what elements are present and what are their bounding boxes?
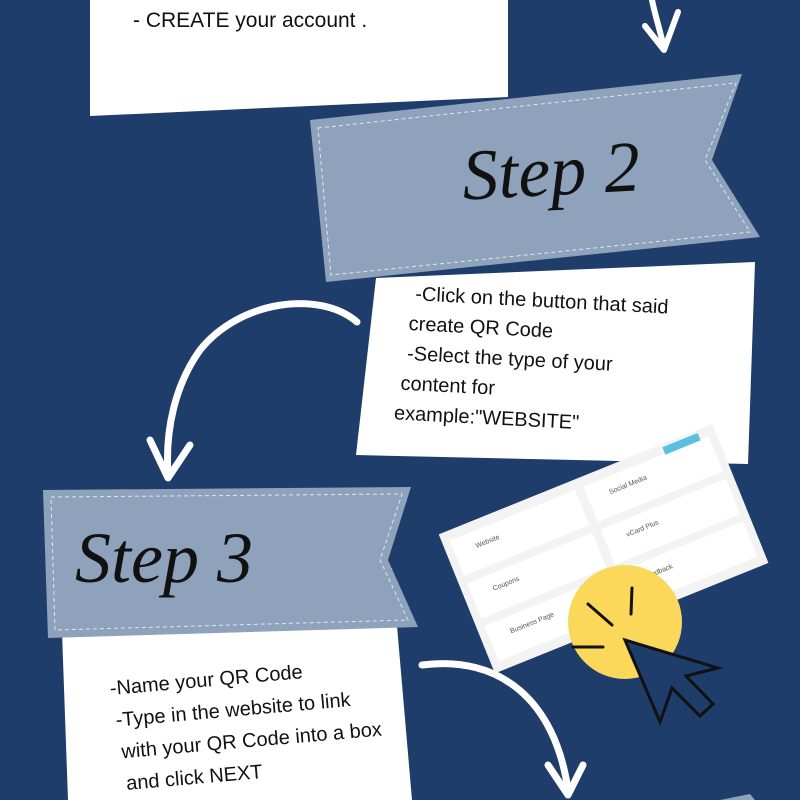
image: QR type screenshot card: Website	[475, 534, 501, 550]
text: step 3: with your QR Code into a box	[120, 719, 383, 763]
image: QR type screenshot card: vCard Plus	[626, 519, 660, 539]
text: step 2	[393, 282, 669, 438]
text: step 1: - CREATE your account .	[133, 9, 367, 32]
image: QR type screenshot card: Business Page	[509, 611, 555, 635]
heading: step 3 ribbon: Step 3	[75, 518, 253, 598]
text: step 3: -Name your QR Code	[109, 661, 304, 700]
heading: step 3 ribbon	[43, 487, 418, 638]
image: QR type screenshot card: Coupons	[492, 575, 521, 593]
heading: step 2 ribbon: Step 2	[460, 126, 642, 216]
text: step 2: content for	[400, 373, 496, 400]
panel: step 1 box	[90, 0, 508, 116]
panel: step 2 box	[356, 262, 755, 464]
text: step 3	[109, 655, 385, 796]
heading: step 2 ribbon	[310, 74, 760, 282]
image: QR type screenshot card: Feedback	[643, 563, 674, 581]
icon: click cursor	[568, 565, 718, 722]
image: QR type screenshot card: Social Media	[608, 475, 648, 496]
panel: step 3 box	[62, 568, 412, 800]
text: step 2: example:"WEBSITE"	[393, 402, 580, 434]
text: step 2: -Click on the button that said	[415, 283, 669, 319]
text: step 2: create QR Code	[408, 313, 554, 343]
image: QR type screenshot card	[439, 424, 768, 673]
text: step 3: and click NEXT	[125, 761, 263, 795]
text: step 3: -Type in the website to link	[115, 689, 352, 732]
text: step 2: -Select the type of your	[407, 343, 613, 376]
arrow: curved left	[150, 304, 357, 478]
arrow: bottom curved	[422, 664, 583, 795]
arrow: top right	[645, 0, 678, 50]
decoration: bottom ribbon corner	[720, 794, 755, 800]
